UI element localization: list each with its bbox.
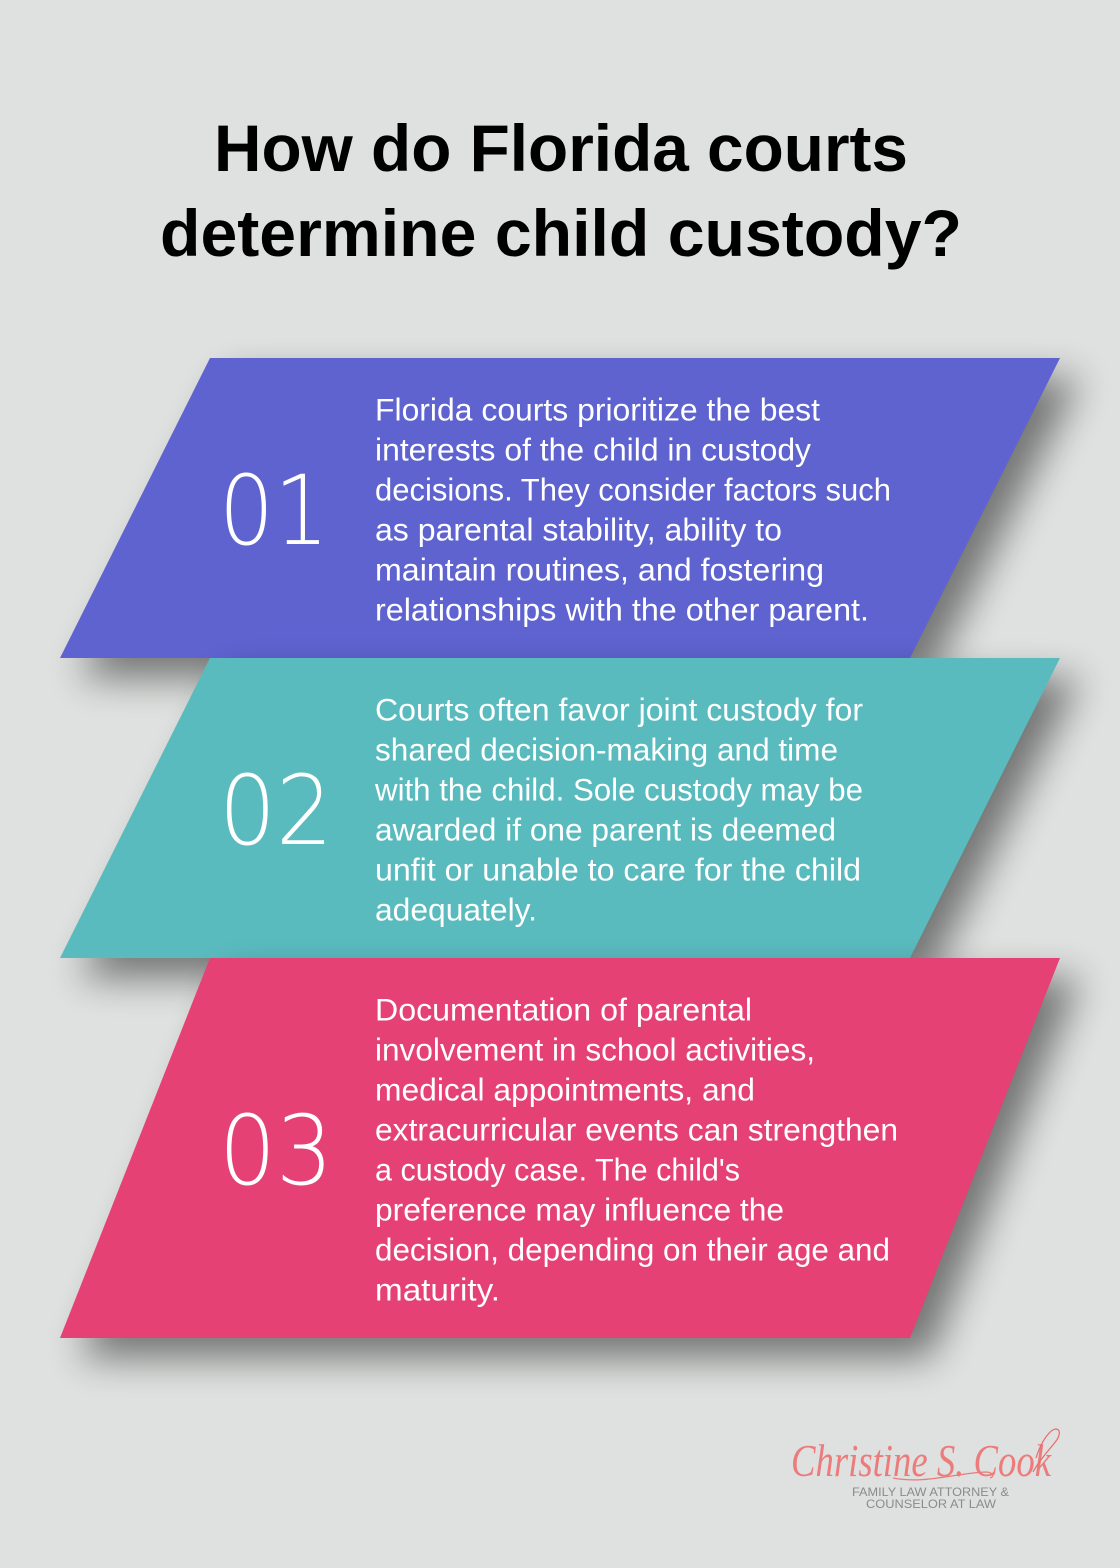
text block: step 01: relationships with the other parent. <box>375 592 869 628</box>
parallelogram: teal <box>60 658 1060 958</box>
text block: step 03: preference may influence the <box>375 1192 784 1228</box>
text block: step 02: shared decision-making and time <box>375 732 838 768</box>
text block: step 03: Documentation of parental <box>375 992 752 1028</box>
text block: step 02: Courts often favor joint custody for <box>375 692 863 728</box>
text block: step 03 <box>375 992 898 1308</box>
text block: step 02: with the child. Sole custody may be <box>374 772 863 808</box>
text block: step 01 <box>375 392 891 628</box>
text block: step 01: as parental stability, ability to <box>375 512 782 548</box>
text block: step 02: awarded if one parent is deemed <box>375 812 836 848</box>
text block: step 02 <box>374 692 863 928</box>
number 01: 01 <box>219 455 329 567</box>
number 03: 03 <box>219 1095 333 1207</box>
logo: Christine S. Cook: COUNSELOR AT LAW <box>866 1497 997 1511</box>
panel: step 01 <box>60 358 1080 678</box>
text block: step 03: extracurricular events can strengthen <box>375 1112 898 1148</box>
logo: Christine S. Cook: FAMILY LAW ATTORNEY & <box>852 1485 1009 1499</box>
logo: Christine S. Cook <box>791 1429 1059 1511</box>
text block: step 01: Florida courts prioritize the best <box>375 392 820 428</box>
title: determine child custody? <box>160 196 962 270</box>
parallelogram: pink <box>60 958 1060 1338</box>
text block: step 01: maintain routines, and fostering <box>375 552 824 588</box>
text block: step 01: decisions. They consider factors such <box>375 472 891 508</box>
number 02: 02 <box>219 755 333 867</box>
logo: Christine S. Cook: Christine S. Cook <box>791 1435 1052 1486</box>
text block: step 02: unfit or unable to care for the child <box>375 852 861 888</box>
parallelogram: purple <box>60 358 1060 658</box>
text block: step 01: interests of the child in custody <box>375 432 811 468</box>
title: How do Florida courts <box>214 111 908 185</box>
text block: step 03: involvement in school activities, <box>375 1032 815 1068</box>
text block: step 03: a custody case. The child's <box>375 1152 740 1188</box>
panel: step 03 <box>60 958 1080 1358</box>
title <box>160 111 962 270</box>
panel: step 02 <box>60 658 1080 978</box>
text block: step 03: medical appointments, and <box>375 1072 755 1108</box>
text block: step 02: adequately. <box>375 892 537 928</box>
text block: step 03: maturity. <box>375 1272 500 1308</box>
text block: step 03: decision, depending on their age and <box>375 1232 890 1268</box>
